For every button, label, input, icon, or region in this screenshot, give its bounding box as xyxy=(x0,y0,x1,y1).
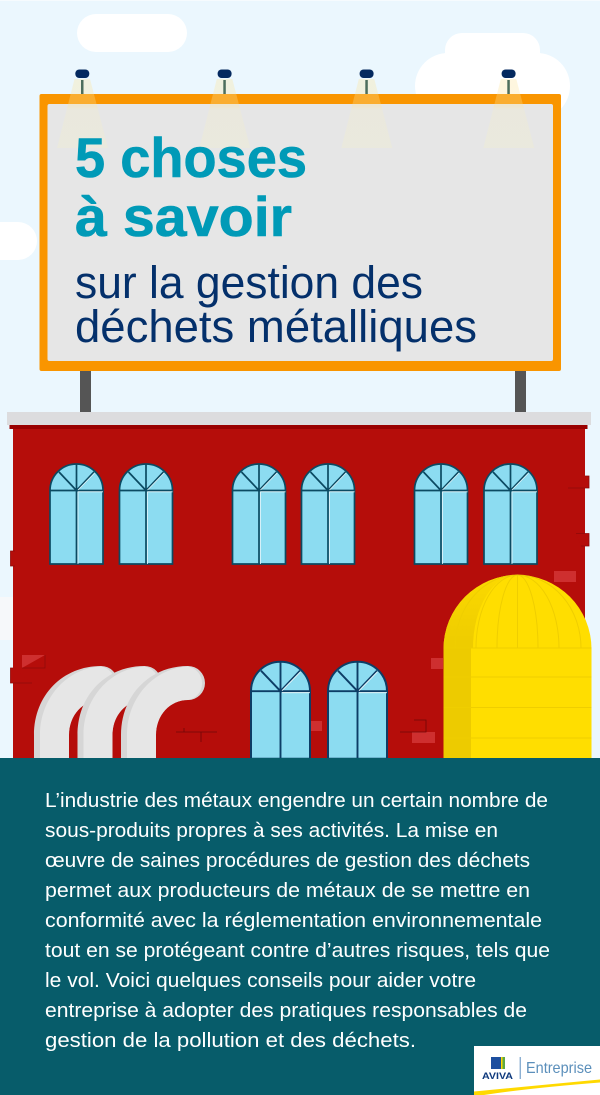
intro text: œuvre de saines procédures de gestion des déchets xyxy=(45,850,530,872)
subtitle xyxy=(75,257,477,352)
title: 5 choses xyxy=(75,126,307,189)
intro text: L’industrie des métaux engendre un certain nombre de xyxy=(45,790,548,812)
wall brick details xyxy=(10,476,589,743)
upper row of windows xyxy=(50,464,537,564)
billboard lamps xyxy=(57,70,534,148)
title: à savoir xyxy=(75,185,292,248)
cloud: left edge xyxy=(0,222,37,260)
roof ledge xyxy=(7,412,591,425)
billboard xyxy=(40,94,561,371)
cloud: top right xyxy=(415,33,570,119)
lower row of windows xyxy=(251,662,387,759)
Aviva Entreprise logo: Entreprise xyxy=(526,1060,592,1077)
intro text: permet aux producteurs de métaux de se mettre en xyxy=(45,880,530,902)
intro text: gestion de la pollution et des déchets. xyxy=(45,1030,416,1052)
intro panel xyxy=(0,758,600,1095)
billboard posts xyxy=(80,371,526,412)
Aviva Entreprise logo: AVIVA xyxy=(482,1071,514,1081)
subtitle: déchets métalliques xyxy=(75,301,477,352)
intro text xyxy=(45,790,550,1052)
intro text: conformité avec la réglementation environnementale xyxy=(45,910,542,932)
intro text: sous-produits propres à ses activités. La mise en xyxy=(45,820,498,842)
building wall xyxy=(10,425,588,758)
Aviva Entreprise logo xyxy=(474,1046,600,1095)
intro text: entreprise à adopter des pratiques responsables de xyxy=(45,1000,527,1022)
title xyxy=(75,126,307,248)
exhaust pipes xyxy=(34,666,205,758)
intro text: le vol. Voici quelques conseils pour aider votre xyxy=(45,970,476,992)
intro text: tout en se protégeant contre d’autres risques, tels que xyxy=(45,940,550,962)
subtitle: sur la gestion des xyxy=(75,257,423,308)
cloud: top left xyxy=(77,14,187,52)
yellow silo xyxy=(444,575,592,758)
